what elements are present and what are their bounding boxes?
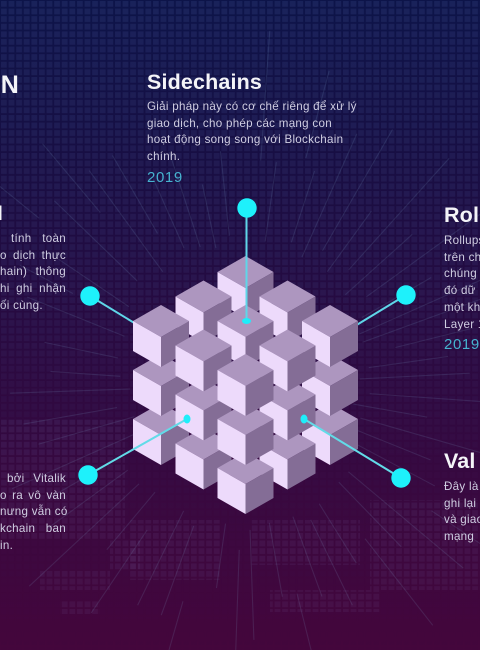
panel: Sidechains: [147, 70, 357, 186]
node: lower left: [78, 465, 98, 485]
text: upper left description: tính toàn: [11, 232, 66, 245]
text: lower left description: nưng vẫn có: [0, 505, 68, 518]
connector: top vertical: [242, 210, 251, 324]
node: lower right: [391, 468, 411, 488]
text: Rollups description: chúng: [444, 267, 477, 280]
text: upper left description: ối cùng.: [0, 299, 43, 312]
text: upper left description: o dịch thực: [0, 249, 66, 262]
text: Sidechains description: [147, 100, 357, 163]
text: lower left description: in.: [0, 539, 13, 552]
year: 2019: 2019: [444, 336, 480, 353]
text: lower left description: o ra vô vàn: [0, 489, 66, 502]
text: lower left description: bởi Vitalik: [7, 472, 66, 485]
text: Sidechains description: giao dịch, cho phép các mạng con: [147, 117, 332, 130]
panel: lower left, clipped at left edge: [0, 472, 68, 552]
text: Validium description: Đây là: [444, 480, 479, 493]
node: upper right: [396, 285, 416, 305]
text: Sidechains description: Giải pháp này có cơ chế riêng để xử lý: [147, 100, 357, 113]
panel: Validium, clipped at right edge: [444, 449, 480, 543]
heading: Sidechains: Sidechains: [147, 70, 262, 94]
text: Rollups description: [444, 234, 480, 331]
text: upper left description: hain) thông: [0, 265, 66, 278]
panel: Rollups, clipped at right edge: [444, 203, 480, 353]
panel: upper left, clipped at left edge: [0, 201, 66, 312]
connector: lower right: [300, 414, 401, 478]
node: top: [237, 198, 257, 218]
text: Validium description: [444, 480, 480, 543]
node: upper left: [80, 286, 100, 306]
cube block: 3x3x3: [133, 256, 358, 514]
text: upper left description: hi ghi nhận: [0, 282, 66, 295]
text: Validium description: mạng: [444, 530, 474, 543]
connector: upper left and upper right, behind cube: [90, 295, 406, 326]
text: lower left description: kchain ban: [0, 522, 66, 535]
text: Sidechains description: chính.: [147, 150, 180, 163]
connector: lower left: [88, 414, 190, 475]
year: 2019: 2019: [147, 169, 183, 186]
text: Sidechains description: hoạt động song song với Blockchain: [147, 133, 343, 146]
text: upper left description: [0, 232, 66, 312]
text: Validium description: ghi lại: [444, 497, 476, 510]
title fragment, clipped at left edge: N: [1, 71, 19, 99]
text: lower left description: [0, 472, 68, 552]
